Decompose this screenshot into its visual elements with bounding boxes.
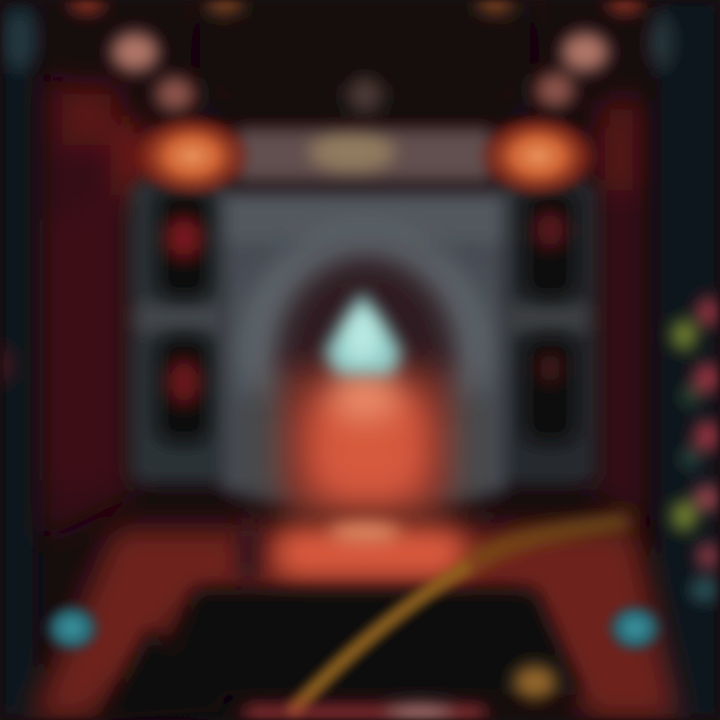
panel: side windows	[158, 190, 576, 442]
window: upper left	[158, 190, 210, 298]
stripe lower	[290, 565, 470, 714]
orange glow	[295, 385, 440, 510]
panel: right red wall	[590, 95, 650, 525]
arrow: gold diagonal stripe	[290, 520, 630, 714]
orange glow core	[318, 371, 418, 495]
pink ceiling globes	[111, 32, 609, 113]
post	[236, 525, 260, 581]
panel: left red wall	[42, 70, 150, 540]
panel: red floor	[30, 522, 680, 720]
panel: stone lintel	[235, 128, 493, 182]
ceiling dark band	[200, 0, 530, 115]
window: upper right	[524, 190, 576, 298]
panel: black central carpet	[105, 590, 580, 720]
icon: left teal light	[40, 600, 104, 656]
window: lower right	[524, 336, 576, 442]
top orange lamps	[69, 0, 643, 12]
panel: bottom pink strip	[245, 705, 485, 720]
panel: grey stone portal	[222, 192, 506, 492]
window: lower left	[158, 336, 210, 442]
panel: right column indicator lights	[672, 297, 720, 601]
panel: arch interior	[274, 254, 458, 510]
icon: gold floor glow	[513, 665, 557, 699]
panel: left side block	[130, 180, 230, 485]
stripe upper	[470, 520, 630, 565]
floor glow	[275, 528, 465, 578]
pale teal flame	[324, 292, 402, 375]
panel: arch ring	[243, 232, 487, 500]
panel: left dark column	[0, 0, 38, 720]
floor base	[30, 528, 680, 720]
floor highlight	[329, 522, 401, 542]
panel: glowing doorway	[295, 292, 440, 510]
icon: right lintel lamp	[476, 112, 600, 200]
icon: right teal light	[603, 600, 667, 656]
panel: right dark column	[648, 0, 720, 720]
panel: right side block	[498, 180, 596, 485]
panel: ceiling lights	[69, 0, 643, 115]
icon: left lintel lamp	[130, 112, 254, 200]
